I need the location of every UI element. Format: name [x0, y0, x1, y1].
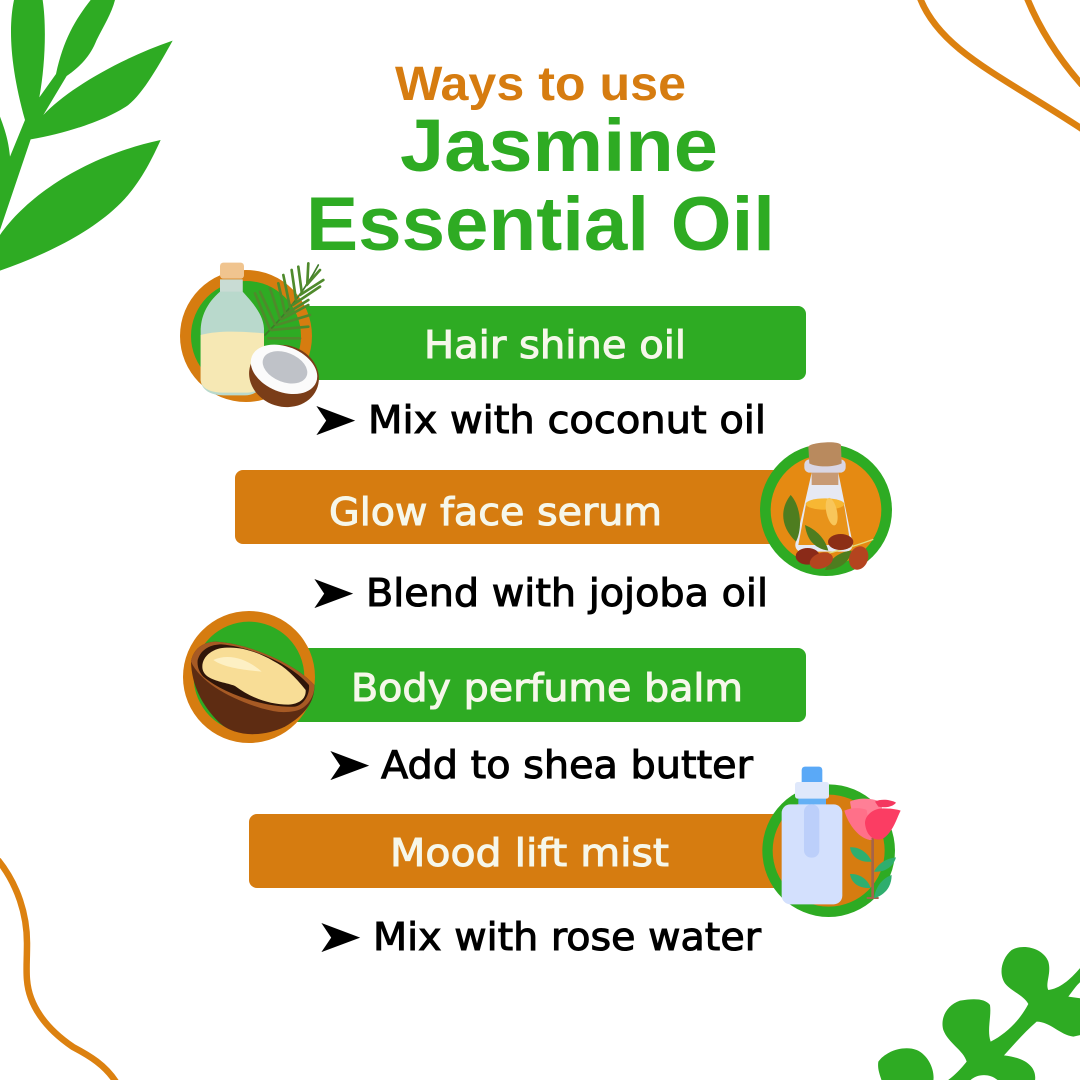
title block: [306, 58, 775, 267]
heading: jasmine: Jasmine: [400, 104, 718, 187]
sub text: mix with rose water: [315, 909, 761, 963]
sub text: add to shea butter: ➤: [324, 737, 372, 791]
item 1: hair shine oil: [180, 263, 806, 446]
icon: shea butter bowl: [183, 611, 315, 743]
icon: coconut oil bottle: [180, 263, 327, 416]
bar: hair shine oil: Hair shine oil: [424, 323, 686, 367]
sub text: blend with jojoba oil: ➤: [308, 565, 356, 619]
sub text: mix with coconut oil: ➤: [310, 392, 358, 446]
item 2: glow face serum: [235, 442, 892, 619]
sub text: mix with coconut oil: [310, 392, 766, 446]
heading: essential oil: Essential Oil: [306, 182, 775, 267]
sub text: blend with jojoba oil: [308, 565, 768, 619]
bar: mood lift mist: [249, 814, 789, 888]
bar: mood lift mist: Mood lift mist: [390, 831, 669, 875]
sub text: mix with rose water: Mix with rose water: [373, 915, 761, 959]
decoration: top-right orange curves: [920, 0, 1080, 129]
sub text: mix with rose water: ➤: [315, 909, 363, 963]
sub text: add to shea butter: [324, 737, 753, 791]
bar: body perfume balm: [290, 648, 806, 722]
item 3: body perfume balm: [183, 611, 806, 791]
decoration: top-left green leaves: [0, 0, 173, 271]
bar: body perfume balm: Body perfume balm: [351, 666, 743, 710]
bar: hair shine oil: [290, 306, 806, 380]
decoration: bottom-right green branch: [878, 947, 1080, 1080]
heading: ways to use: Ways to use: [395, 58, 686, 111]
sub text: add to shea butter: Add to shea butter: [381, 743, 753, 787]
icon: rose water spray bottle: [762, 767, 901, 917]
bar: glow face serum: Glow face serum: [329, 490, 662, 534]
icon: jojoba oil vial: [760, 442, 892, 576]
sub text: blend with jojoba oil: Blend with jojoba oil: [366, 571, 768, 615]
sub text: mix with coconut oil: Mix with coconut oil: [368, 398, 766, 442]
item 4: mood lift mist: [249, 767, 901, 963]
decoration: bottom-left orange curve: [0, 860, 116, 1080]
bar: glow face serum: [235, 470, 795, 544]
